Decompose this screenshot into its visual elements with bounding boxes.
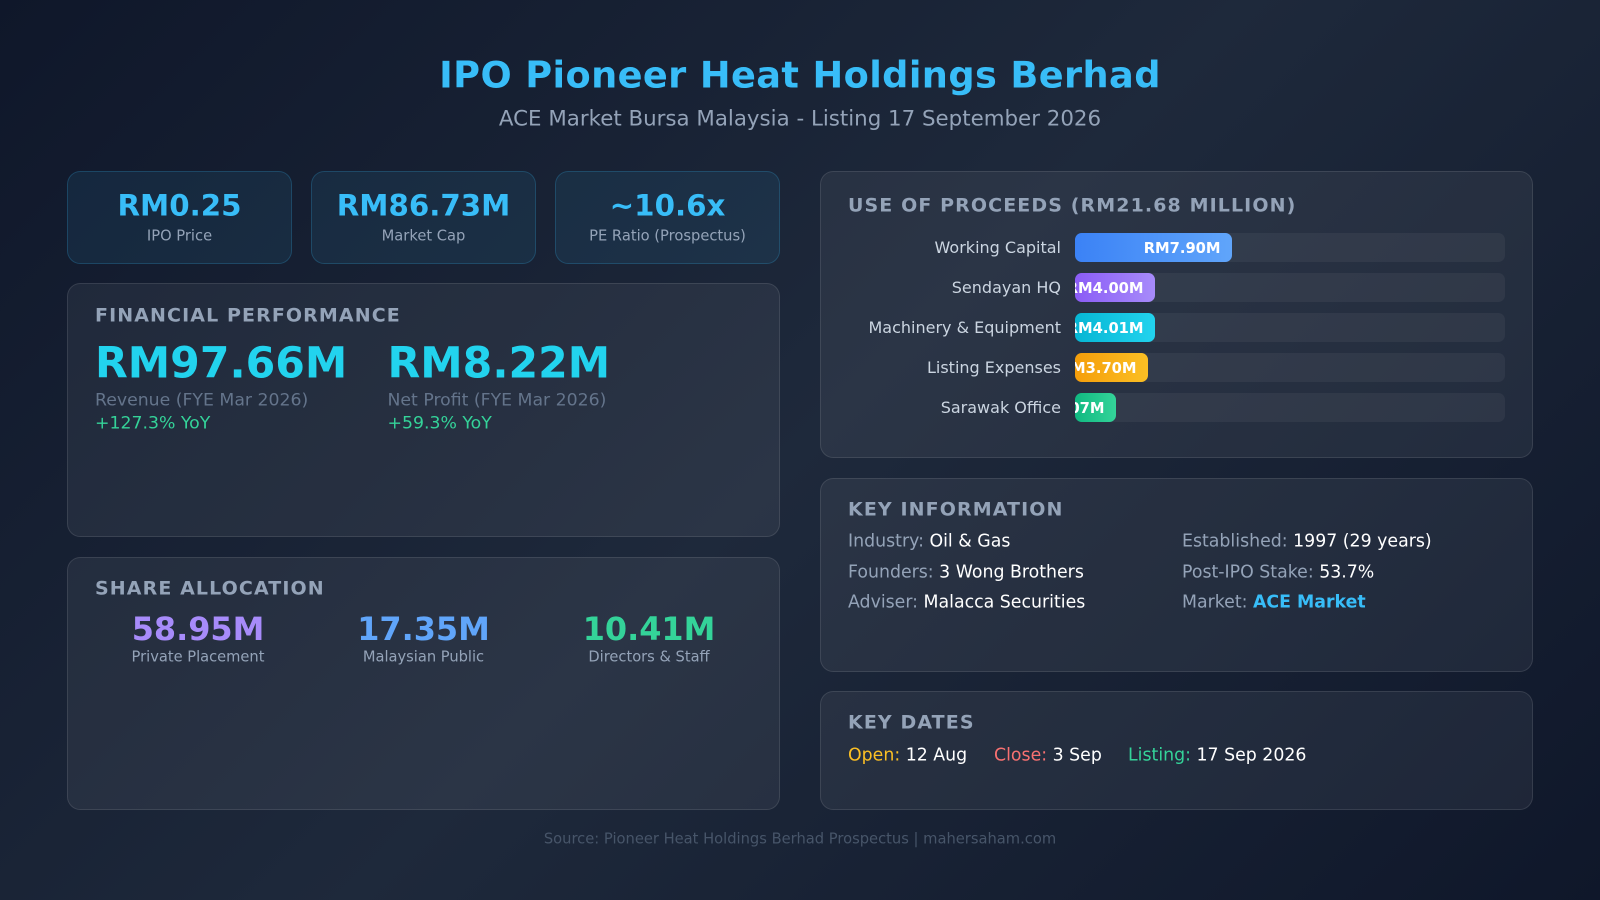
title: IPO Pioneer Heat Holdings Berhad xyxy=(439,53,1161,96)
info: established: Established: 1997 (29 years) xyxy=(1182,531,1432,551)
date: close: Close: 3 Sep xyxy=(994,745,1102,765)
stat card: market cap xyxy=(311,171,536,264)
heading: key information: KEY INFORMATION xyxy=(848,498,1064,520)
private placement label: Private Placement xyxy=(132,648,264,665)
net profit label: Net Profit (FYE Mar 2026) xyxy=(388,390,606,410)
panel: share allocation xyxy=(67,557,780,810)
label: Sarawak office: Sarawak Office xyxy=(941,398,1061,417)
bar: machinery and equipment xyxy=(1075,313,1505,342)
heading: financial performance: FINANCIAL PERFORMANCE xyxy=(95,304,401,326)
net profit value: RM8.22M xyxy=(388,339,610,389)
stat card: IPO price xyxy=(67,171,292,264)
IPO price value: RM0.25 xyxy=(118,188,242,222)
bar: working capital: RM7.90M xyxy=(1144,240,1220,257)
date: open: Open: 12 Aug xyxy=(848,745,967,765)
bar: listing expenses xyxy=(1075,353,1505,382)
IPO price label: IPO Price xyxy=(147,227,212,244)
market cap value: RM86.73M xyxy=(337,188,510,222)
panel: key dates xyxy=(820,691,1533,810)
Malaysian public value: 17.35M xyxy=(357,610,490,648)
info: industry: Industry: Oil & Gas xyxy=(848,531,1010,551)
panel: use of proceeds xyxy=(820,171,1533,458)
revenue growth: +127.3% YoY xyxy=(95,413,210,433)
label: machinery and equipment: Machinery & Equipment xyxy=(868,318,1061,337)
info: post-IPO stake: Post-IPO Stake: 53.7% xyxy=(1182,562,1374,582)
directors and staff value: 10.41M xyxy=(583,610,715,648)
heading: key dates: KEY DATES xyxy=(848,712,975,734)
panel: key information xyxy=(820,478,1533,672)
info: founders: Founders: 3 Wong Brothers xyxy=(848,562,1084,582)
bar: working capital xyxy=(1075,233,1505,262)
bar: Sendayan HQ xyxy=(1075,273,1505,302)
label: Sendayan HQ: Sendayan HQ xyxy=(952,278,1061,297)
heading: use of proceeds: USE OF PROCEEDS (RM21.68 MILLION) xyxy=(848,194,1296,216)
PE ratio label: PE Ratio (Prospectus) xyxy=(589,227,746,244)
info: adviser: Adviser: Malacca Securities xyxy=(848,592,1085,612)
revenue label: Revenue (FYE Mar 2026) xyxy=(95,390,308,410)
stat card: PE ratio xyxy=(555,171,780,264)
bar: Sarawak office xyxy=(1075,393,1505,422)
revenue value: RM97.66M xyxy=(95,339,347,389)
panel: financial performance xyxy=(67,283,780,537)
subtitle: ACE Market Bursa Malaysia - Listing 17 September 2026 xyxy=(499,106,1101,131)
Malaysian public label: Malaysian Public xyxy=(363,648,484,665)
PE ratio value: ~10.6x xyxy=(610,188,725,222)
label: listing expenses: Listing Expenses xyxy=(927,358,1061,377)
market cap label: Market Cap xyxy=(382,227,465,244)
info: market: Market: ACE Market xyxy=(1182,592,1366,612)
directors and staff label: Directors & Staff xyxy=(588,648,710,665)
date: listing: Listing: 17 Sep 2026 xyxy=(1128,745,1306,765)
footer source: Source: Pioneer Heat Holdings Berhad Prospectus | mahersaham.com xyxy=(544,830,1056,847)
private placement value: 58.95M xyxy=(132,610,264,648)
net profit growth: +59.3% YoY xyxy=(388,413,492,433)
heading: share allocation: SHARE ALLOCATION xyxy=(95,578,325,600)
label: working capital: Working Capital xyxy=(935,238,1061,257)
